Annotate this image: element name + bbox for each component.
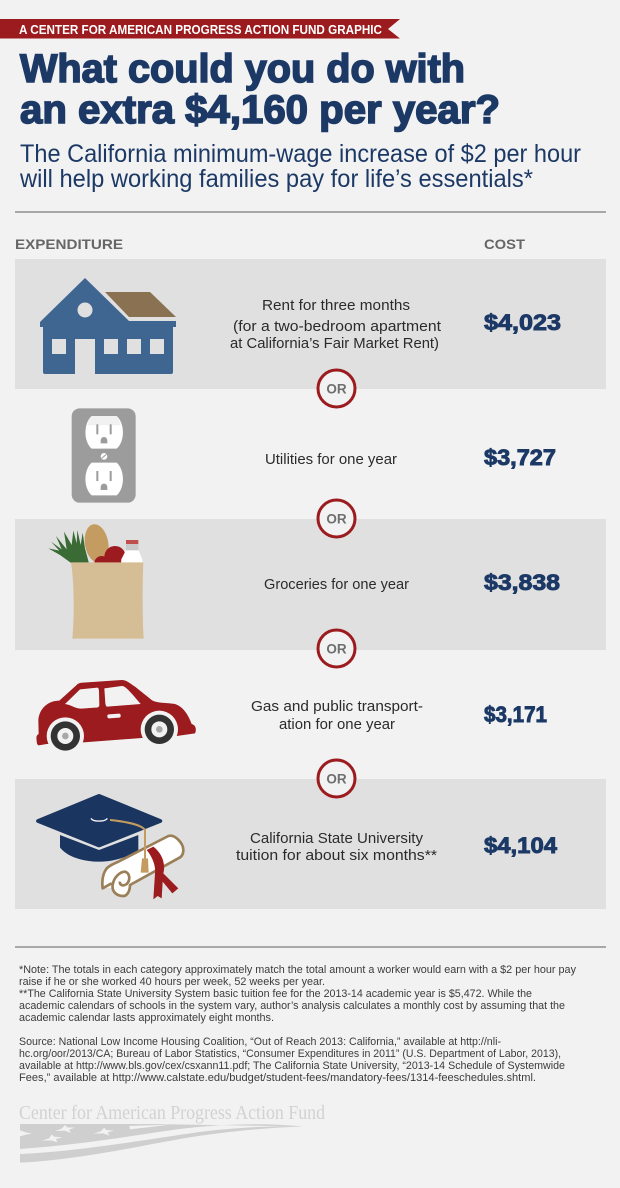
cost: rent: $4,023 <box>484 310 561 335</box>
OR badge 4 <box>318 760 355 797</box>
panel: utilities <box>72 408 556 503</box>
description: tuition: tuition for about six months** <box>236 847 437 864</box>
description: rent: at California’s Fair Market Rent) <box>230 335 439 352</box>
OR badge 4: OR <box>326 772 347 786</box>
source: Fees,” available at http://www.calstate.edu/budget/student-fees/mandatory-fees/1314-feeschedules.shtml. <box>19 1072 536 1084</box>
ribbon banner: A CENTER FOR AMERICAN PROGRESS ACTION FUND GRAPHIC <box>19 22 383 37</box>
footnotes: academic calendars of schools in the system vary, author’s analysis calculates a monthly cost by assuming that the <box>19 1000 565 1012</box>
icon: grocery bag <box>48 522 144 639</box>
title: an extra $4,160 per year? <box>20 88 500 132</box>
subtitle: The California minimum-wage increase of $2 per hour <box>20 140 581 168</box>
cost: transportation: $3,171 <box>484 702 547 727</box>
description: tuition <box>236 830 437 864</box>
OR badge 1: OR <box>326 382 347 396</box>
footnotes: *Note: The totals in each category approximately match the total amount a worker would earn with a $2 per hour pay <box>19 964 576 976</box>
footnotes: raise if he or she worked 40 hours per week, 52 weeks per year. <box>19 976 325 988</box>
description: rent: Rent for three months <box>262 297 410 314</box>
OR badge 2 <box>318 500 355 537</box>
description: utilities: Utilities for one year <box>265 451 397 468</box>
description: rent <box>230 297 442 352</box>
OR badge 2: OR <box>326 512 347 526</box>
icon: car <box>36 680 196 755</box>
title: What could you do with <box>20 47 465 91</box>
source: Source: National Low Income Housing Coalition, “Out of Reach 2013: California,” available at http://nli- <box>19 1036 501 1048</box>
source: hc.org/oor/2013/CA; Bureau of Labor Statistics, “Consumer Expenditures in 2011” (U.S. Department of Labor, 2013), <box>19 1048 561 1060</box>
icon: electrical outlet <box>72 408 136 503</box>
source <box>19 1036 565 1084</box>
OR badge 3: OR <box>326 642 347 656</box>
column headings <box>15 236 525 252</box>
description: transportation: Gas and public transport- <box>251 698 423 715</box>
cost: utilities: $3,727 <box>484 445 556 470</box>
logo: Center for American Progress Action Fund <box>19 1102 325 1124</box>
OR badge 3 <box>318 630 355 667</box>
footnotes <box>19 964 576 1024</box>
cost: tuition: $4,104 <box>484 833 558 858</box>
description: rent: (for a two-bedroom apartment <box>233 318 442 335</box>
footnotes: academic calendar lasts approximately eight months. <box>19 1012 274 1024</box>
subtitle: will help working families pay for life’s essentials* <box>19 165 533 193</box>
logo <box>19 1102 325 1163</box>
description: transportation <box>251 698 423 733</box>
title <box>20 47 500 132</box>
column headings: EXPENDITURE <box>15 236 123 252</box>
subtitle <box>19 140 581 193</box>
description: transportation: ation for one year <box>279 716 395 733</box>
description: groceries: Groceries for one year <box>264 576 409 593</box>
panel: tuition <box>15 779 606 909</box>
footnotes: **The California State University System basic tuition fee for the 2013-14 academic year is $5,472. While the <box>19 988 532 1000</box>
cost: groceries: $3,838 <box>484 570 560 595</box>
source: available at http://www.bls.gov/cex/csxann11.pdf; The California State University, “2013-14 Schedule of Systemwide <box>19 1060 565 1072</box>
panel: transportation <box>36 680 547 755</box>
panel: groceries <box>15 519 606 650</box>
icon: house <box>40 278 176 374</box>
column headings: COST <box>484 236 525 252</box>
icon: graduation cap and diploma <box>36 794 183 899</box>
OR badge 1 <box>318 370 355 407</box>
description: tuition: California State University <box>250 830 423 847</box>
panel: rent <box>15 259 606 389</box>
